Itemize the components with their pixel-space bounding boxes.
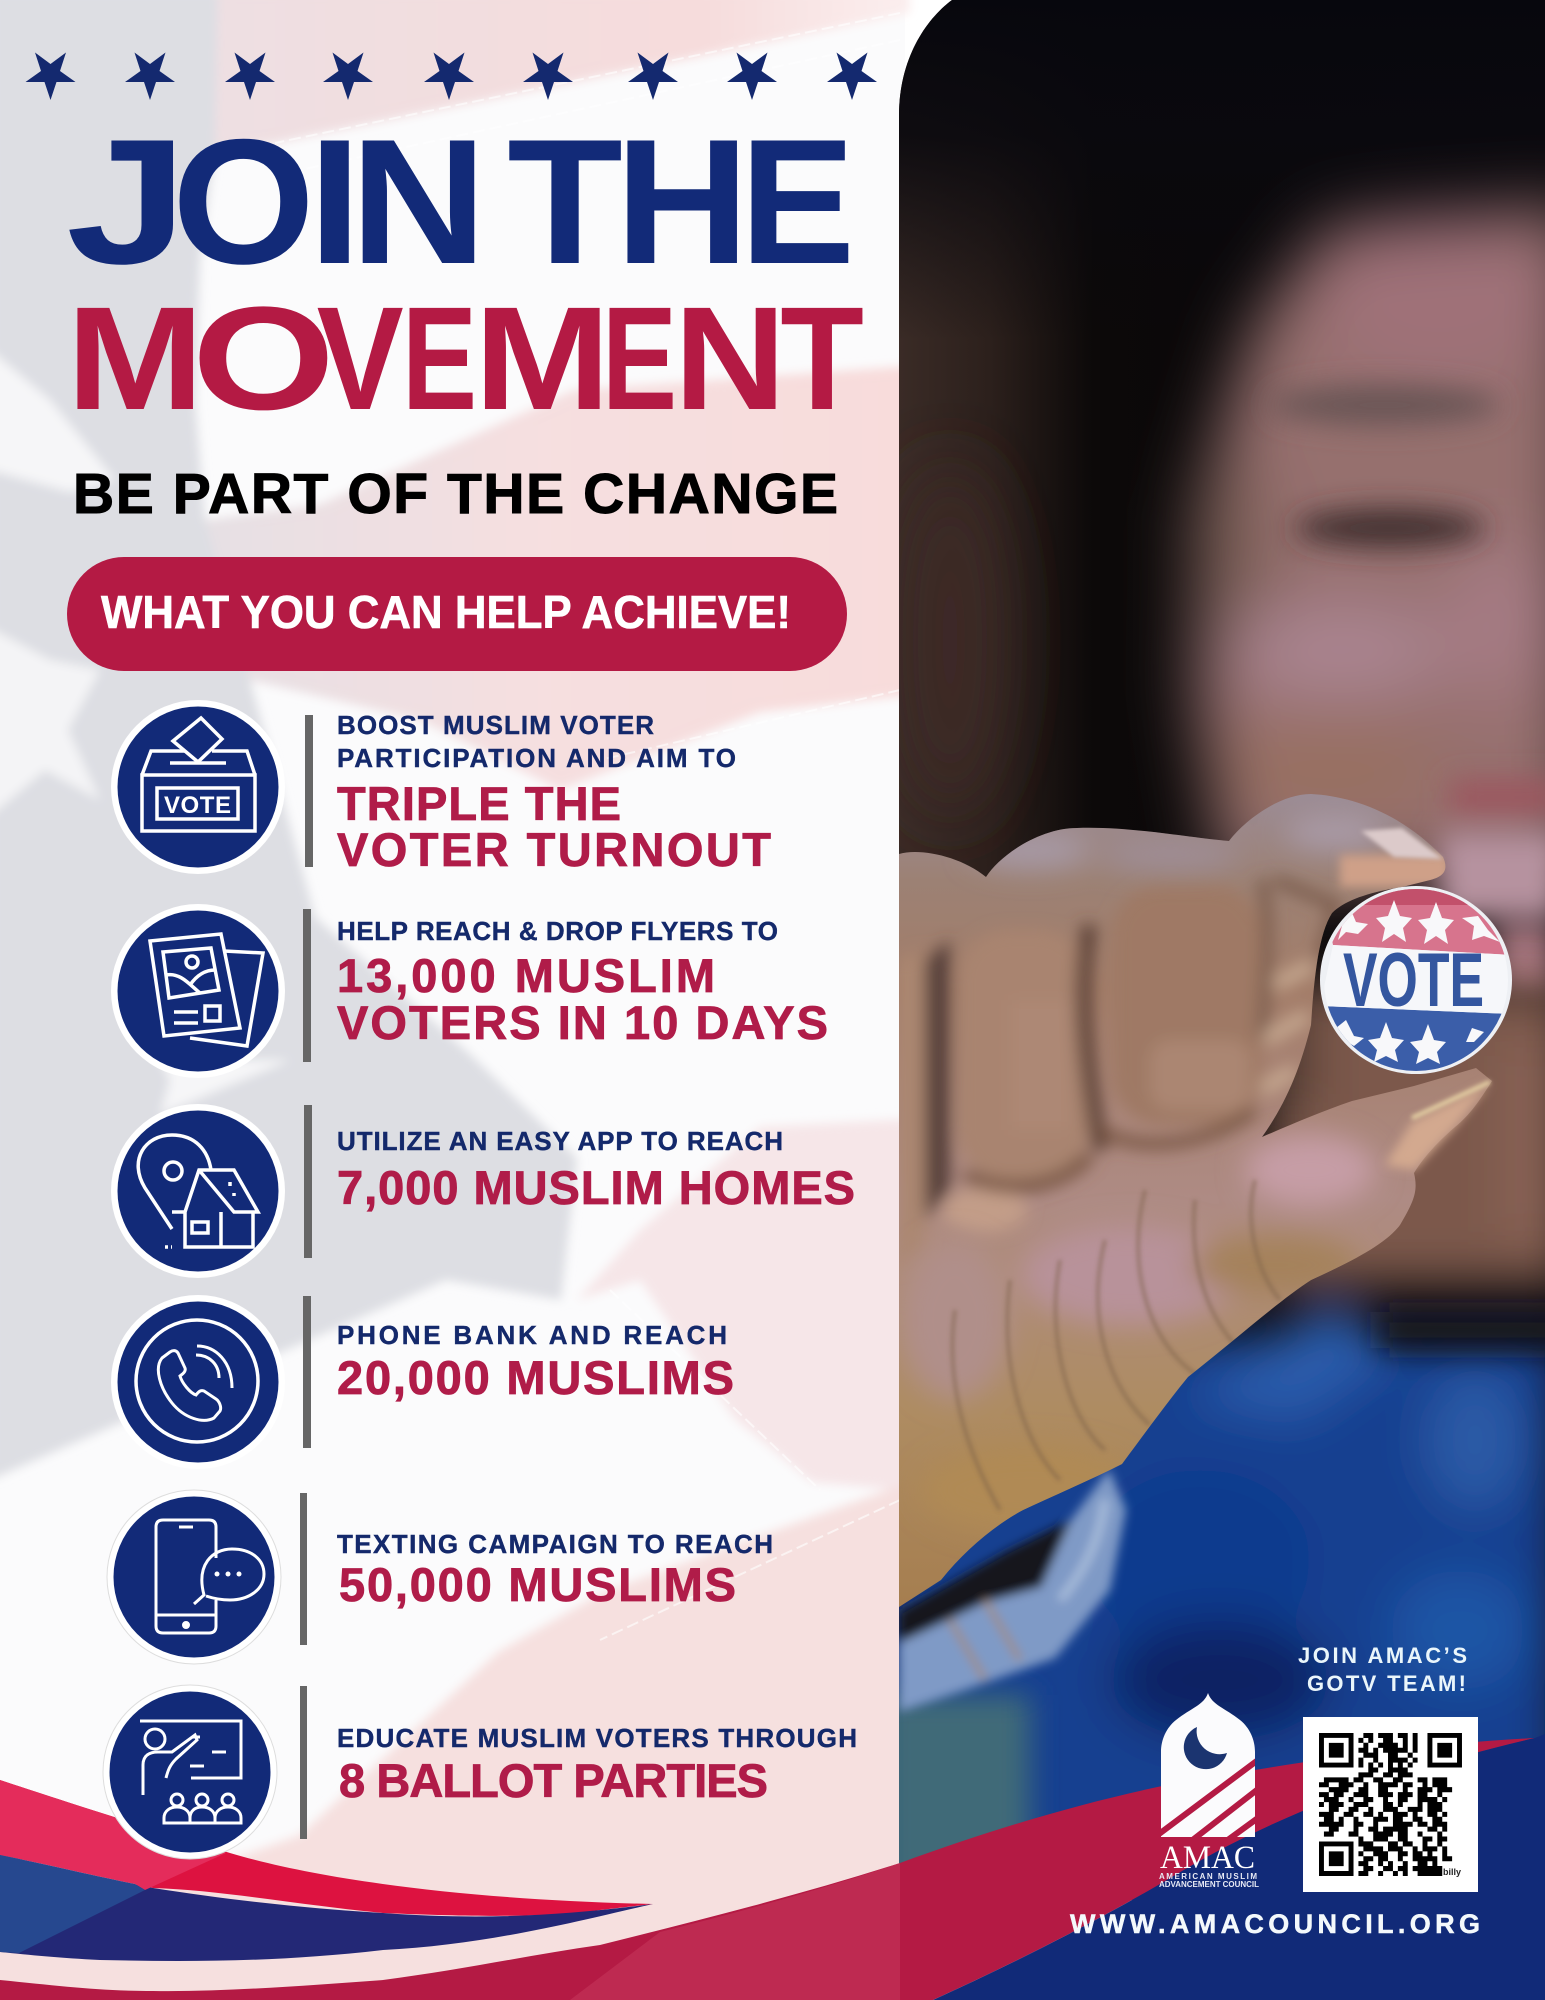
AMAC logo: ADVANCEMENT COUNCIL xyxy=(1159,1880,1259,1889)
hand xyxy=(899,794,1492,1607)
button word: VOTE xyxy=(1343,938,1484,1023)
icon: ballot box xyxy=(111,700,285,874)
item 4: phone bank xyxy=(111,1295,734,1469)
pill banner xyxy=(67,557,847,671)
blurred neck and shirt xyxy=(880,985,1545,1935)
icon: phone xyxy=(111,1295,285,1469)
item 3 text: 7,000 MUSLIM HOMES xyxy=(337,1161,855,1214)
item 1 text: TRIPLE THE xyxy=(337,777,621,830)
item 5 text: 50,000 MUSLIMS xyxy=(339,1558,736,1611)
item 5: texting xyxy=(107,1490,773,1664)
title: E xyxy=(402,277,477,441)
jacket cuff xyxy=(899,1469,1126,1712)
divider bar xyxy=(304,1105,312,1258)
call to action text: JOIN AMAC’S xyxy=(1298,1643,1467,1668)
stars row xyxy=(26,52,877,100)
icon: flyers xyxy=(111,904,285,1078)
item 6 text: EDUCATE MUSLIM VOTERS THROUGH xyxy=(337,1723,857,1753)
item 5 text: TEXTING CAMPAIGN TO REACH xyxy=(337,1529,773,1559)
dark collar band and teal jacket xyxy=(880,1312,1545,1915)
bottom left swoosh: navy xyxy=(0,1855,653,1961)
item 6 text: 8 BALLOT PARTIES xyxy=(339,1754,768,1807)
AMAC logo: AMAC xyxy=(1160,1840,1255,1876)
divider bar xyxy=(303,1296,311,1448)
icon: house and map pin xyxy=(111,1104,285,1278)
title: T xyxy=(507,102,623,301)
item 4 text: 20,000 MUSLIMS xyxy=(337,1351,734,1404)
divider bar xyxy=(300,1686,307,1839)
QR code xyxy=(1303,1717,1478,1892)
bottom left swoosh: red xyxy=(0,1780,653,1916)
photo: woman holding vote button xyxy=(880,0,1545,1935)
item 2 text: VOTERS IN 10 DAYS xyxy=(337,996,828,1049)
AMAC logo: AMERICAN MUSLIM xyxy=(1159,1872,1257,1881)
title: H xyxy=(615,102,750,301)
title: E xyxy=(740,102,855,301)
item 3 text: UTILIZE AN EASY APP TO REACH xyxy=(337,1126,783,1156)
item 1 text: PARTICIPATION AND AIM TO xyxy=(337,743,736,773)
title: E xyxy=(602,277,677,441)
vote button xyxy=(1320,880,1512,1080)
item 1 text: BOOST MUSLIM VOTER xyxy=(337,710,654,740)
title: N xyxy=(350,102,487,301)
item 5 text xyxy=(337,1529,773,1611)
call to action text: GOTV TEAM! xyxy=(1307,1671,1466,1696)
title: M xyxy=(474,277,611,441)
item 3: app homes xyxy=(111,1104,855,1278)
title: I xyxy=(308,102,362,301)
title: T xyxy=(780,277,864,441)
title: V xyxy=(317,277,404,441)
item 2 text xyxy=(337,916,828,1049)
title: O xyxy=(192,277,335,441)
divider bar xyxy=(300,1493,307,1645)
item 4 text xyxy=(337,1320,734,1404)
bottom swoosh: navy right xyxy=(933,1734,1545,2000)
item 2 text: HELP REACH & DROP FLYERS TO xyxy=(337,916,778,946)
bottom swoosh: crimson xyxy=(0,1738,1535,2000)
item 1 text xyxy=(337,710,771,876)
pill banner: WHAT YOU CAN HELP ACHIEVE! xyxy=(101,586,791,638)
item 1 text: VOTER TURNOUT xyxy=(337,823,771,876)
blurred hair and face xyxy=(895,205,1545,880)
icon: phone with chat bubble xyxy=(107,1490,281,1664)
crescent xyxy=(1184,1727,1227,1769)
item 2: flyers xyxy=(111,904,828,1078)
title xyxy=(66,102,864,441)
icon: ballot box: VOTE xyxy=(164,792,231,819)
title: O xyxy=(172,102,315,301)
item 4 text: PHONE BANK AND REACH xyxy=(337,1320,727,1350)
divider bar xyxy=(303,909,311,1062)
title: M xyxy=(66,277,204,441)
item 1: triple voter turnout xyxy=(111,700,771,876)
item 3 text xyxy=(337,1126,855,1214)
item 2 text: 13,000 MUSLIM xyxy=(337,949,715,1002)
title: N xyxy=(674,277,786,441)
AMAC logo xyxy=(1155,1693,1262,1889)
icon: teacher and students xyxy=(103,1685,277,1859)
item 6 text xyxy=(337,1723,857,1807)
call to action text xyxy=(1298,1643,1467,1696)
flag background panel xyxy=(0,0,910,2000)
item 6: ballot parties xyxy=(103,1685,857,1859)
left swoosh lighter overlay xyxy=(0,1780,226,1953)
subtitle: BE PART OF THE CHANGE xyxy=(73,462,838,526)
website url: WWW.AMACOUNCIL.ORG xyxy=(1070,1909,1480,1939)
red stripes xyxy=(1161,1758,1255,1837)
fingers modelled xyxy=(899,880,1335,1270)
finger nails xyxy=(1361,828,1490,1170)
divider bar xyxy=(305,715,313,867)
title: J xyxy=(66,102,188,301)
QR code: billy xyxy=(1443,1867,1461,1877)
